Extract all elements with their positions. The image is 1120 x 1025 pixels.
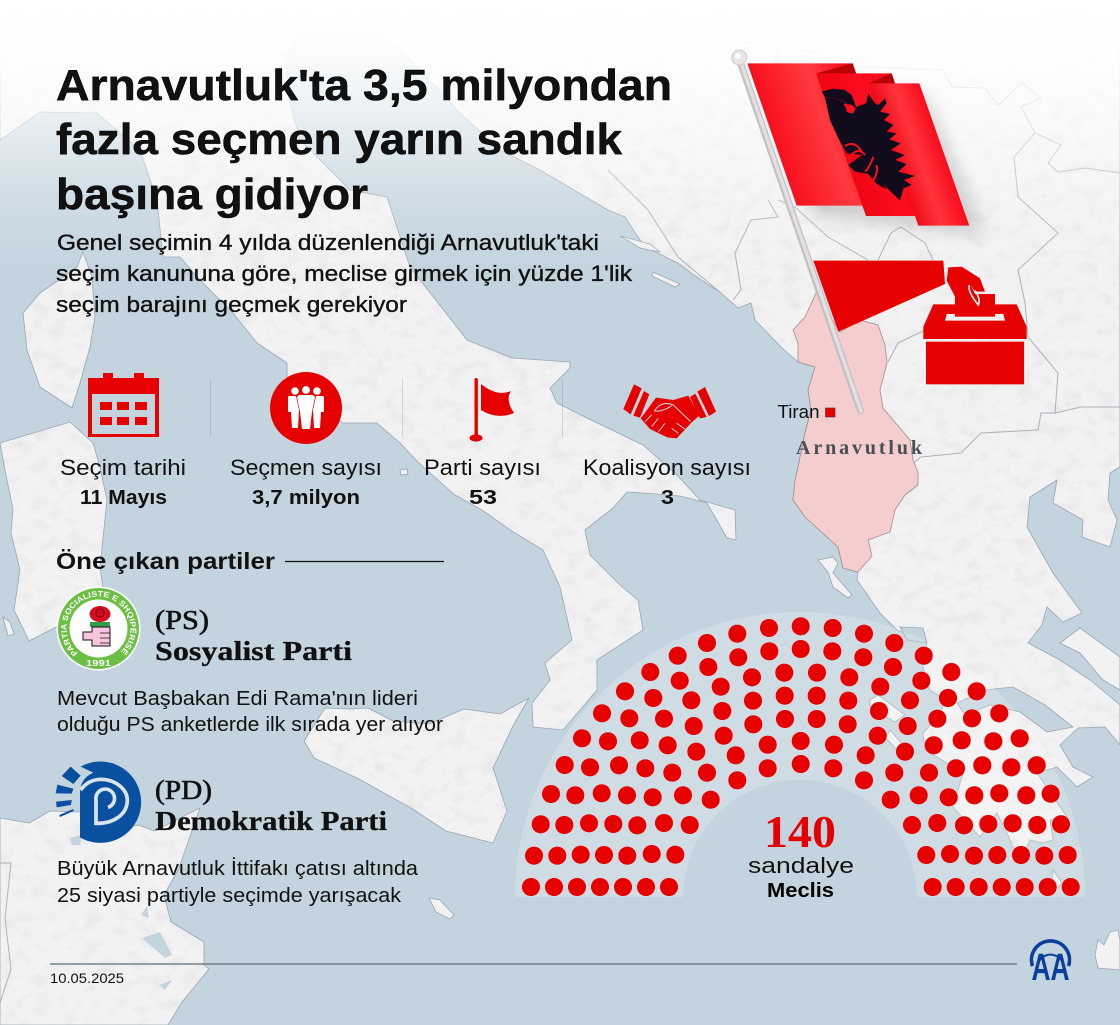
seats total label: 140	[764, 806, 836, 857]
stat: voters: 3,7 milyon	[252, 487, 360, 509]
stat: voters	[230, 372, 382, 509]
subtitle: seçim kanununa göre, meclise girmek için yüzde 1'lik	[56, 261, 633, 286]
Albanian flag on pole	[732, 50, 969, 411]
icon: handshake	[623, 384, 716, 438]
AA logo	[1032, 941, 1070, 989]
parliament seats chart	[522, 617, 1080, 896]
subtitle: seçim barajını geçmek gerekiyor	[56, 292, 407, 317]
party PD description: 25 siyasi partiyle seçimde yarışacak	[57, 885, 402, 907]
title	[56, 61, 672, 219]
icon: calendar	[88, 373, 159, 437]
party: PS: Sosyalist Parti	[155, 636, 353, 666]
stat: coalitions: 3	[661, 487, 674, 509]
hand	[947, 267, 985, 297]
seats total label: sandalye	[748, 853, 854, 878]
Albania highlighted on the map	[793, 293, 918, 572]
flag cloth	[747, 63, 969, 226]
icon: PD logo	[56, 762, 141, 843]
party: PD	[56, 762, 388, 843]
stat dividers	[210, 379, 562, 437]
stat: parties: Parti sayısı	[424, 455, 541, 480]
terrain shading	[8, 204, 1115, 1008]
icon: PS logo: PARTIA SOCIALISTE E SHQIPËRISË	[61, 591, 138, 656]
map label: Tirana: Tiran	[778, 402, 820, 422]
stat: coalitions	[583, 384, 751, 509]
party PD description	[57, 857, 419, 907]
map label: Albania: Arnavutluk	[796, 437, 923, 459]
title: fazla seçmen yarın sandık	[56, 115, 623, 164]
icon: three people	[270, 372, 342, 444]
party PD description: Büyük Arnavutluk İttifakı çatısı altında	[57, 857, 419, 880]
AA logo: AA	[1032, 947, 1070, 989]
footer rule and date: 10.05.2025	[50, 970, 124, 986]
stat: election date: Seçim tarihi	[60, 455, 186, 480]
arm	[813, 261, 945, 332]
flag shadow	[760, 75, 985, 235]
ballot box lid	[923, 304, 1027, 339]
white top fade	[0, 0, 1120, 270]
seats total label: Meclis	[767, 880, 834, 902]
title: başına gidiyor	[56, 170, 368, 219]
party PS description: olduğu PS anketlerde ilk sırada yer alıyor	[57, 714, 443, 736]
stat: election date	[60, 373, 186, 509]
subtitle: Genel seçimin 4 yılda düzenlendiği Arnavutluk'taki	[57, 230, 599, 255]
party: PS	[56, 586, 353, 670]
stat: coalitions: Koalisyon sayısı	[583, 455, 751, 480]
section heading: Öne çıkan partiler	[56, 548, 275, 574]
stat: parties: 53	[469, 487, 497, 509]
party: PD: Demokratik Parti	[155, 806, 388, 836]
ballot box body	[926, 342, 1024, 384]
subtitle	[56, 230, 633, 317]
stat: voters: Seçmen sayısı	[230, 455, 382, 480]
party: PS: (PS)	[155, 605, 209, 635]
ballot box and hand icon	[813, 261, 1027, 384]
stat: election date: 11 Mayıs	[80, 487, 167, 509]
parliament half ring	[515, 612, 1085, 897]
islands and gulfs	[3, 236, 1120, 970]
eagle emblem	[822, 89, 915, 201]
stat: parties	[424, 378, 541, 509]
party: PD: (PD)	[155, 775, 212, 805]
icon: PS logo: 1991	[86, 658, 111, 668]
flag pole	[732, 50, 861, 411]
title: Arnavutluk'ta 3,5 milyondan	[56, 61, 672, 110]
seats total label	[748, 806, 854, 902]
party PS description: Mevcut Başbakan Edi Rama'nın lideri	[57, 688, 418, 710]
party PS description	[57, 688, 443, 736]
ballot paper	[955, 294, 995, 317]
icon: flag	[470, 378, 514, 442]
